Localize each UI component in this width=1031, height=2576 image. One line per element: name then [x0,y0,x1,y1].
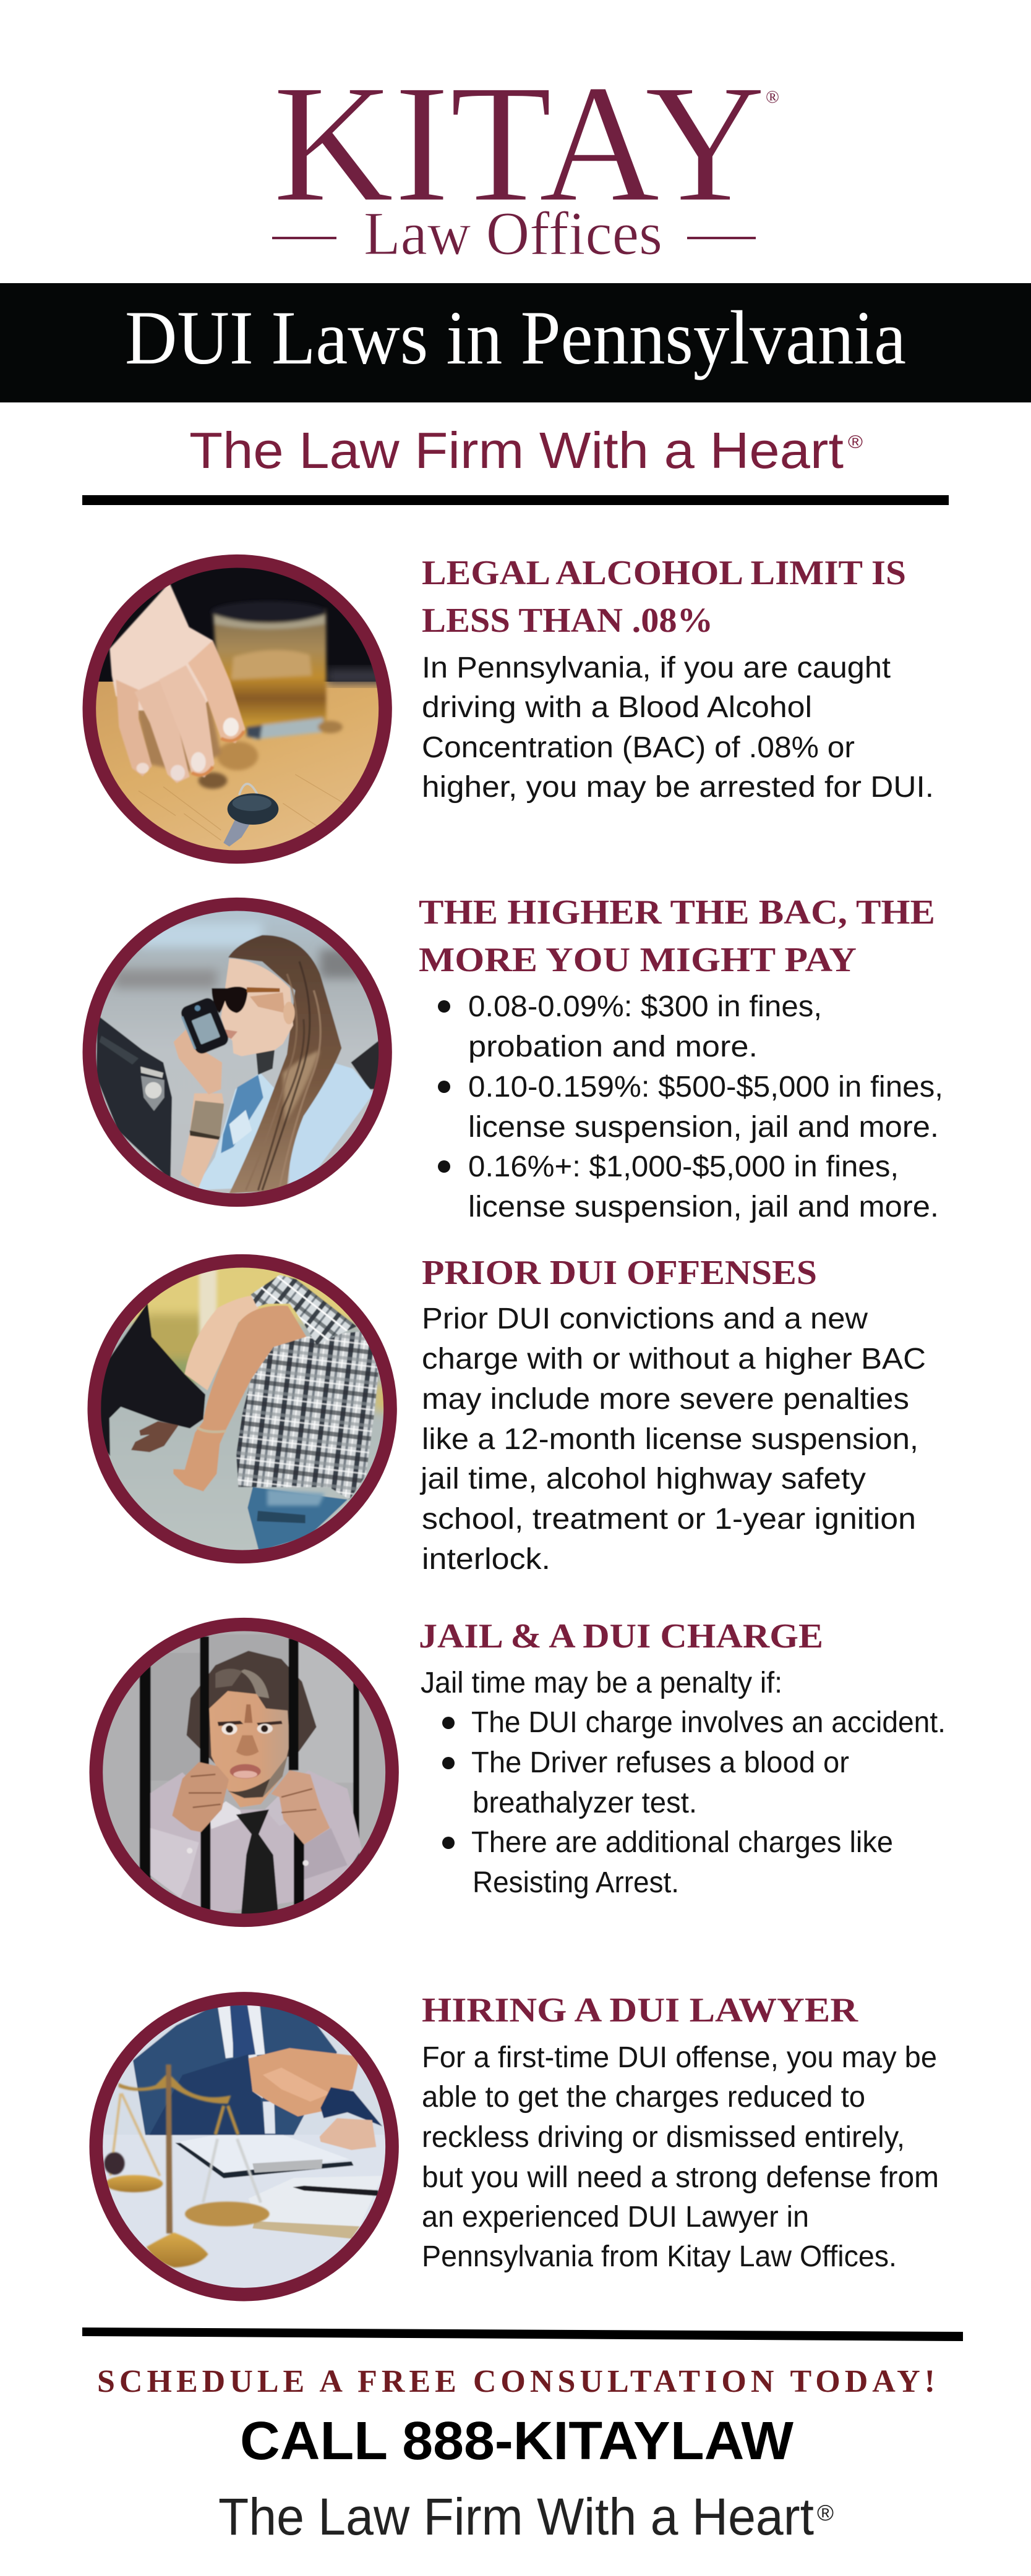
photo: handshake over desk with scales of justice [83,1986,405,2308]
neck shadow [256,1050,275,1075]
heading: HIRING A DUI LAWYER [422,1991,858,2030]
call to action [97,2364,935,2546]
body intro and bullet list: The Driver refuses a blood or [471,1746,849,1779]
face [221,958,293,1056]
clipboard [175,2143,354,2179]
shirt [150,1770,362,1915]
heading: PRIOR DUI OFFENSES [422,1254,817,1292]
schedule consultation line: SCHEDULE A FREE CONSULTATION TODAY! [97,2364,935,2399]
body intro and bullet list: There are additional charges like [471,1826,893,1859]
title band: DUI Laws in Pennsylvania [125,295,906,380]
bullet list: license suspension, jail and more. [468,1111,939,1144]
handcuff [197,1427,226,1432]
sleeve [100,1303,205,1456]
logo: Kitay Law Offices: KITAY [273,50,766,237]
body text: like a 12-month license suspension, [422,1423,918,1456]
notebook and pen [249,2176,382,2226]
bullet list: 0.08-0.09%: $300 in fines, [468,990,822,1023]
suit [133,2005,337,2135]
bullet list: 0.16%+: $1,000-$5,000 in fines, [468,1150,899,1183]
face [209,1691,289,1808]
bracelets [190,1100,224,1137]
hair [187,1651,317,1764]
body text [422,652,934,804]
hand and breathalyzer [174,1023,222,1094]
other hand on table [320,2118,376,2150]
panel: prior DUI offenses [82,1248,926,1576]
body text: an experienced DUI Lawyer in [422,2201,809,2234]
back arm [185,1296,259,1390]
body text: Prior DUI convictions and a new [422,1303,868,1335]
logo: Kitay Law Offices: ® [766,88,779,107]
body text: In Pennsylvania, if you are caught [422,652,891,684]
photo: hand reaching for car keys beside a whiskey glass [77,548,398,869]
plaid shirt [236,1330,379,1500]
body text: reckless driving or dismissed entirely, [422,2121,905,2154]
body intro and bullet list: Jail time may be a penalty if: [421,1667,782,1699]
photo: worried man gripping jail bars [83,1612,405,1933]
lips [225,1029,237,1039]
heading: LEGAL ALCOHOL LIMIT IS [422,554,906,592]
officer [96,1015,172,1180]
back bars [140,1665,151,1879]
closing tagline: ® [817,2500,834,2525]
title band [0,283,1031,402]
body text: interlock. [422,1543,550,1576]
front arm [173,1306,306,1491]
heading: JAIL & A DUI CHARGE [419,1617,823,1656]
wrist and arm [181,1094,224,1188]
tagline: The Law Firm With a Heart [189,422,844,479]
fingers [116,679,152,776]
panel: legal alcohol limit [77,548,934,869]
body text: but you will need a strong defense from [422,2161,939,2194]
shirt [195,1073,275,1190]
car [351,1040,380,1089]
logo: Kitay Law Offices: Law Offices [364,199,662,268]
cuff [249,2054,263,2099]
panel: higher BAC [77,891,943,1223]
scales of justice [104,2065,270,2268]
front bars [200,1636,209,1764]
body text: For a first-time DUI offense, you may be [422,2041,937,2074]
hands [172,1762,229,1832]
heading [422,554,906,640]
body intro and bullet list: The DUI charge involves an accident. [471,1706,946,1739]
body text [419,1303,926,1576]
handshake [249,2048,360,2117]
body text: able to get the charges reduced to [422,2081,865,2114]
tie [236,1809,278,1915]
hair [228,935,341,1193]
body text: Concentration (BAC) of .08% or [422,731,855,764]
body text [422,2041,939,2273]
heading [419,893,935,979]
other hand [131,1421,179,1452]
phone number: CALL 888-KITAYLAW [240,2411,794,2471]
body text: may include more severe penalties [422,1383,909,1416]
bullet list [438,990,943,1223]
body text: higher, you may be arrested for DUI. [422,771,934,804]
tagline: ® [848,432,863,453]
body text: charge with or without a higher BAC [422,1343,926,1375]
panel: jail and a DUI charge [83,1612,946,1933]
heading: LESS THAN .08% [422,601,713,640]
photo: handcuffed man in plaid shirt led by officer [82,1248,403,1570]
heading: MORE YOU MIGHT PAY [419,941,857,979]
body text: driving with a Blood Alcohol [422,691,812,724]
body text: jail time, alcohol highway safety [419,1463,866,1495]
closing tagline: The Law Firm With a Heart [218,2488,814,2546]
bullet list: 0.10-0.159%: $500-$5,000 in fines, [468,1071,943,1103]
body text: Pennsylvania from Kitay Law Offices. [422,2240,897,2273]
sunglasses [212,987,248,1013]
panel: hiring a DUI lawyer [83,1986,939,2308]
body intro and bullet list: Resisting Arrest. [473,1866,679,1899]
body intro and bullet list: breathalyzer test. [473,1787,697,1819]
body intro and bullet list [421,1667,946,1899]
heading: THE HIGHER THE BAC, THE [419,893,935,932]
bullet list: probation and more. [468,1031,758,1063]
car key [223,784,278,846]
body text: school, treatment or 1-year ignition [422,1503,916,1536]
jeans [247,1487,348,1551]
photo: woman using breathalyzer beside police officer [77,891,398,1213]
bullet list: license suspension, jail and more. [468,1191,939,1223]
back of hand [109,584,214,712]
